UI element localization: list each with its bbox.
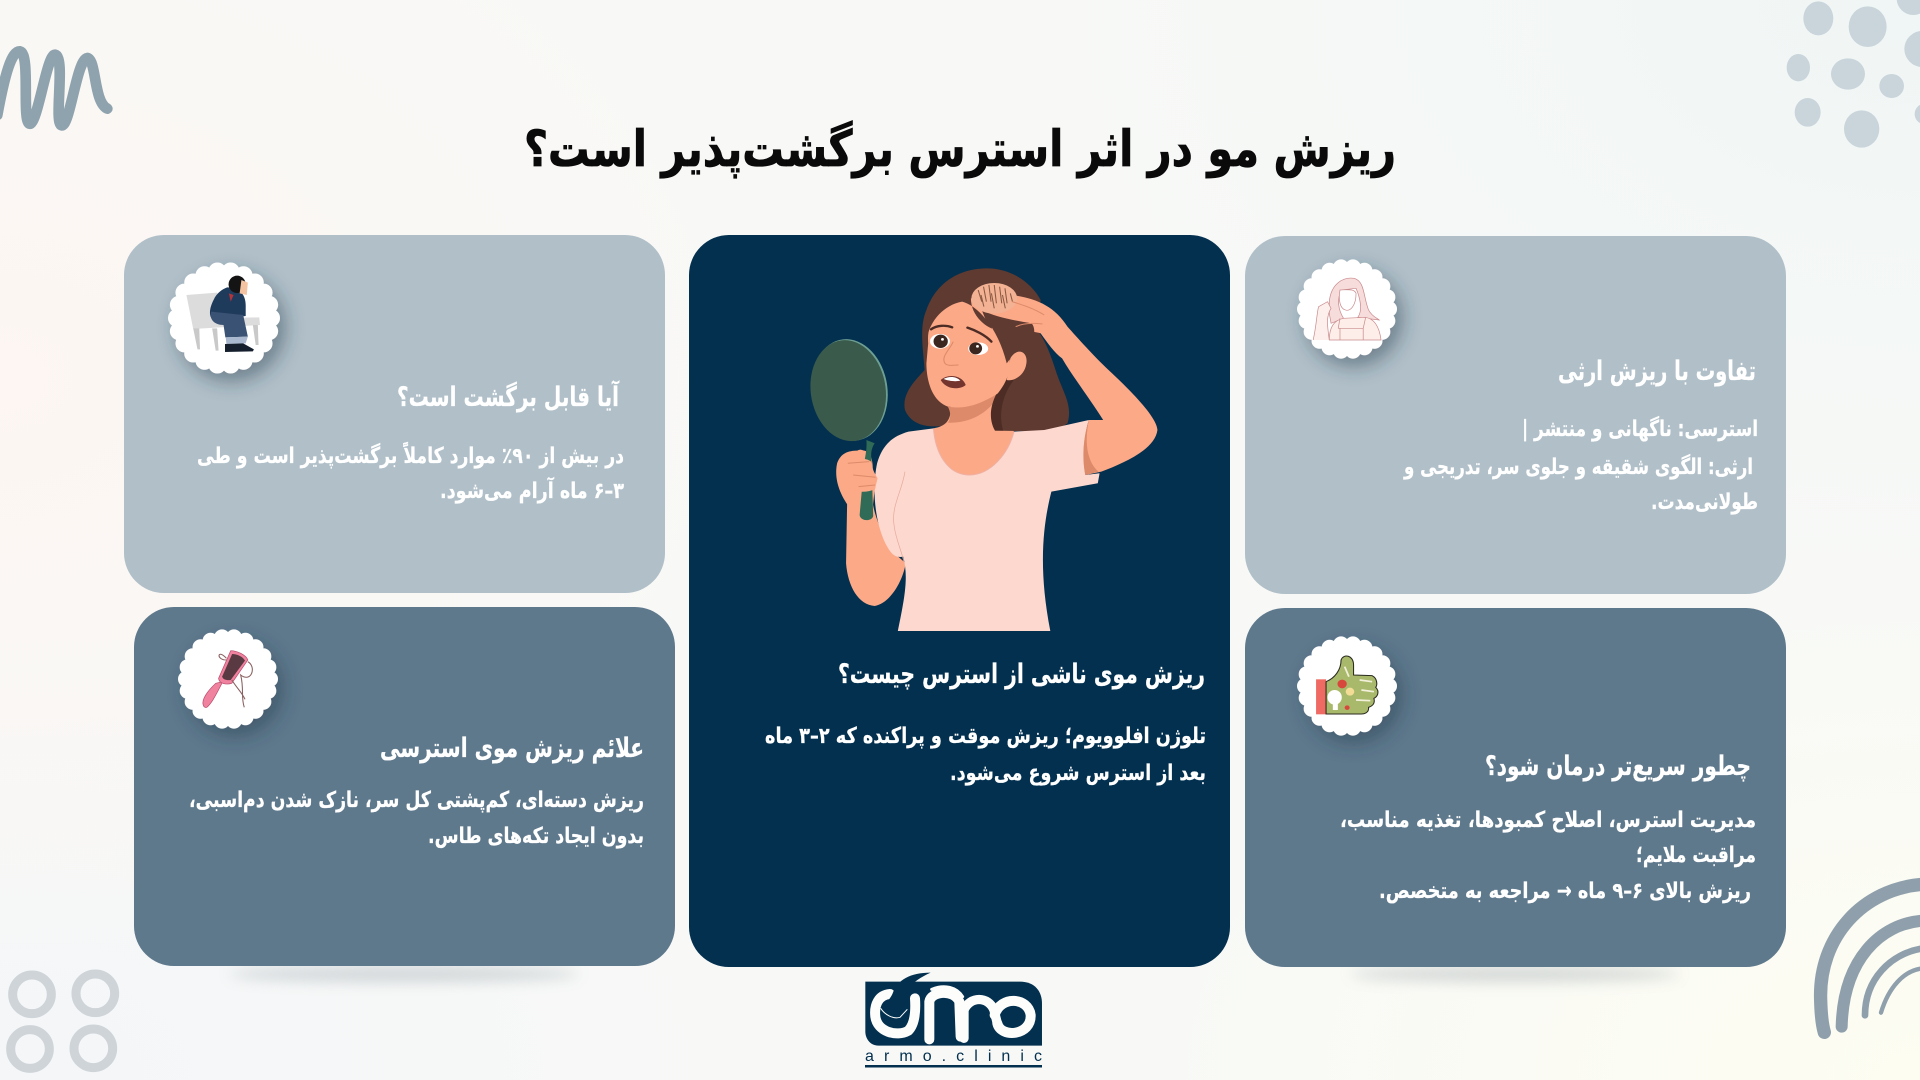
body text xyxy=(189,788,644,849)
body text xyxy=(1340,808,1756,904)
face xyxy=(926,298,1010,407)
illustration: woman with mirror xyxy=(804,268,1157,631)
body text xyxy=(197,441,624,504)
panel: faster treatment xyxy=(1245,608,1786,967)
nose xyxy=(944,342,959,365)
badge: thumbs up with food xyxy=(1302,641,1392,731)
body text: طولانی‌مدت. xyxy=(1651,490,1758,515)
fingers on handle xyxy=(841,458,877,492)
body text xyxy=(1403,415,1758,515)
hand palm xyxy=(836,450,877,510)
logo: armo clinic: armo.clinic xyxy=(865,1048,1042,1065)
heading: تفاوت با ریزش ارثی xyxy=(1558,356,1756,387)
front hair xyxy=(926,295,1010,363)
body text: مدیریت استرس، اصلاح کمبودها، تغذیه مناسب، xyxy=(1340,808,1756,833)
panel: difference with genetic hair loss xyxy=(1245,236,1786,594)
eyebrows xyxy=(931,326,991,342)
mirror handle xyxy=(860,440,875,520)
decoration: squiggle top left xyxy=(0,51,107,125)
body text: ریزش دسته‌ای، کم‌پشتی کل سر، نازک شدن دم‌اسبی، xyxy=(189,788,644,813)
left forearm xyxy=(846,503,906,606)
badge: stressed man on chair xyxy=(174,268,274,368)
body text: در بیش از ۹۰٪ موارد کاملاً برگشت‌پذیر است و طی xyxy=(197,441,624,469)
raised arm and hand xyxy=(984,295,1157,475)
body text xyxy=(765,724,1206,786)
body text: بدون ایجاد تکه‌های طاس. xyxy=(428,824,644,849)
hair back xyxy=(904,268,1069,432)
body text: ۳–۶ ماه آرام می‌شود. xyxy=(440,476,624,504)
decoration: rainbow arcs bottom right xyxy=(1821,884,1920,1032)
logo: armo clinic xyxy=(865,973,1042,1068)
body text: تلوژن افلوویوم؛ ریزش موقت و پراکنده که ۲–۳ ماه xyxy=(765,724,1206,749)
mouth xyxy=(941,376,966,388)
dark hair sliver xyxy=(991,378,1014,431)
body text: استرسی: ناگهانی و منتشر | xyxy=(1522,415,1758,442)
heading: چطور سریع‌تر درمان شود؟ xyxy=(1485,751,1751,782)
hair beside neck xyxy=(995,378,1039,431)
thinning scalp xyxy=(971,283,1017,314)
body text: ریزش بالای ۶–۹ ماه → مراجعه به متخصص. xyxy=(1379,879,1751,904)
decoration: dots top right xyxy=(1787,0,1920,148)
heading: علائم ریزش موی استرسی xyxy=(380,733,644,764)
panel: what is stress hair loss xyxy=(689,235,1230,967)
body text: مراقبت ملایم؛ xyxy=(1636,843,1756,868)
panel: symptoms xyxy=(134,607,675,966)
panel: is it reversible xyxy=(124,235,665,593)
body text: بعد از استرس شروع می‌شود. xyxy=(950,761,1206,786)
fingers xyxy=(1012,302,1044,327)
neck xyxy=(934,387,1014,475)
decoration: rings bottom left xyxy=(11,974,115,1068)
badge: hair brush xyxy=(183,634,273,724)
heading: ریزش موی ناشی از استرس چیست؟ xyxy=(838,659,1205,690)
mirror xyxy=(804,335,894,445)
body text: ارثی: الگوی شقیقه و جلوی سر، تدریجی و xyxy=(1403,453,1753,480)
title: ریزش مو در اثر استرس برگشت‌پذیر است؟ xyxy=(524,120,1396,179)
eyes xyxy=(930,334,988,355)
badge: woman touching hair xyxy=(1302,264,1392,354)
heading: آیا قابل برگشت است؟ xyxy=(397,380,620,413)
shadows below bottom cards xyxy=(229,966,1680,982)
shirt xyxy=(875,420,1100,631)
